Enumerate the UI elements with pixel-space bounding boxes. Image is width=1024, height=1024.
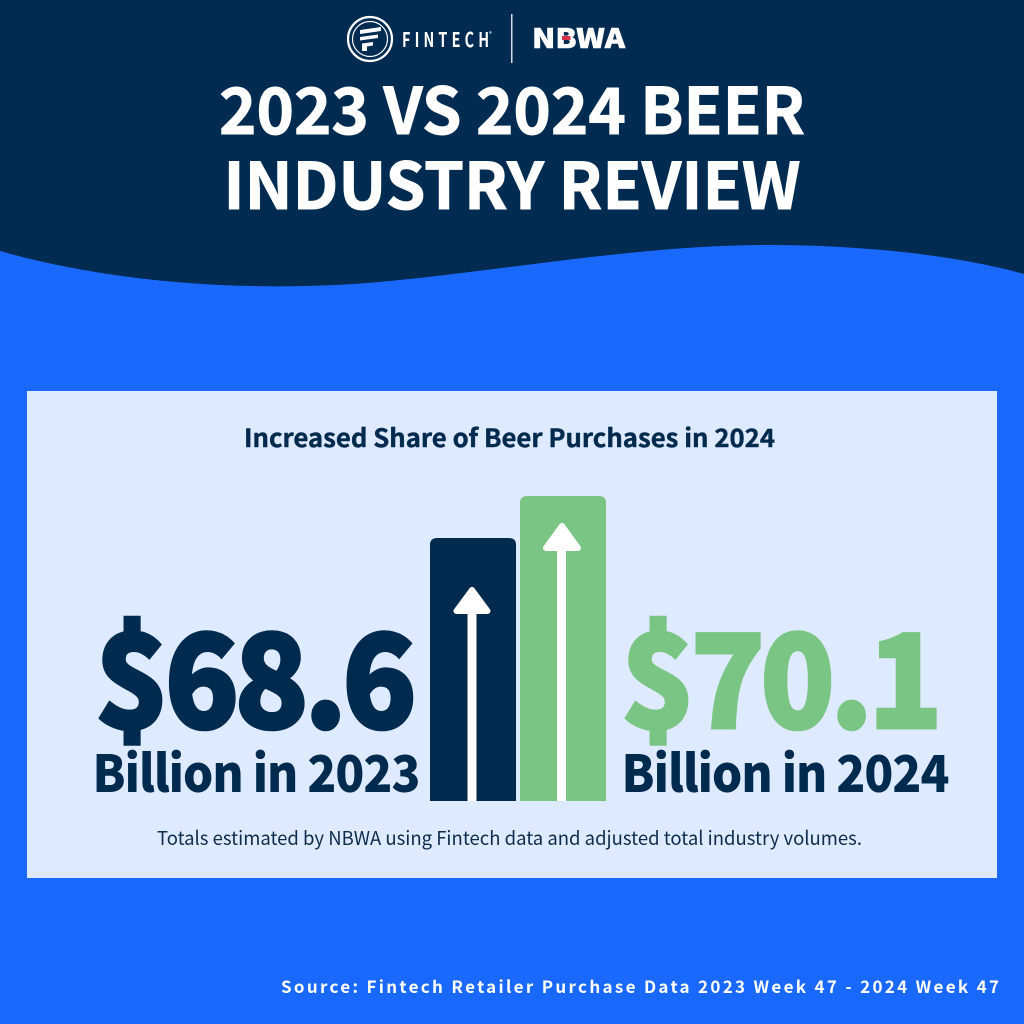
logo: Fintech: FINTECH <box>402 25 489 54</box>
bar: 2024 with arrow <box>520 496 606 801</box>
logo: NBWA: NBWA <box>532 17 626 56</box>
footnote: Totals estimated by NBWA using Fintech data and adjusted total industry volumes. <box>157 824 862 851</box>
2023 value: $68.6 <box>95 578 412 766</box>
title: 2023 VS 2024 BEER <box>219 61 805 153</box>
title: INDUSTRY REVIEW <box>224 136 800 228</box>
logo: Fintech <box>348 17 492 61</box>
logo divider <box>511 14 512 63</box>
2023 label: Billion in 2023 <box>92 733 420 807</box>
panel: beer purchases <box>27 391 997 878</box>
bar: 2023 with arrow <box>430 538 516 801</box>
2024 value: $70.1 <box>621 578 938 766</box>
2024 label: Billion in 2024 <box>622 733 948 807</box>
title <box>219 61 805 228</box>
source line: Source: Fintech Retailer Purchase Data 2023 Week 47 - 2024 Week 47 <box>281 973 999 998</box>
logo: Fintech: ® <box>489 29 492 38</box>
panel heading: Increased Share of Beer Purchases in 2024 <box>244 419 775 455</box>
header wave band <box>0 0 1024 286</box>
